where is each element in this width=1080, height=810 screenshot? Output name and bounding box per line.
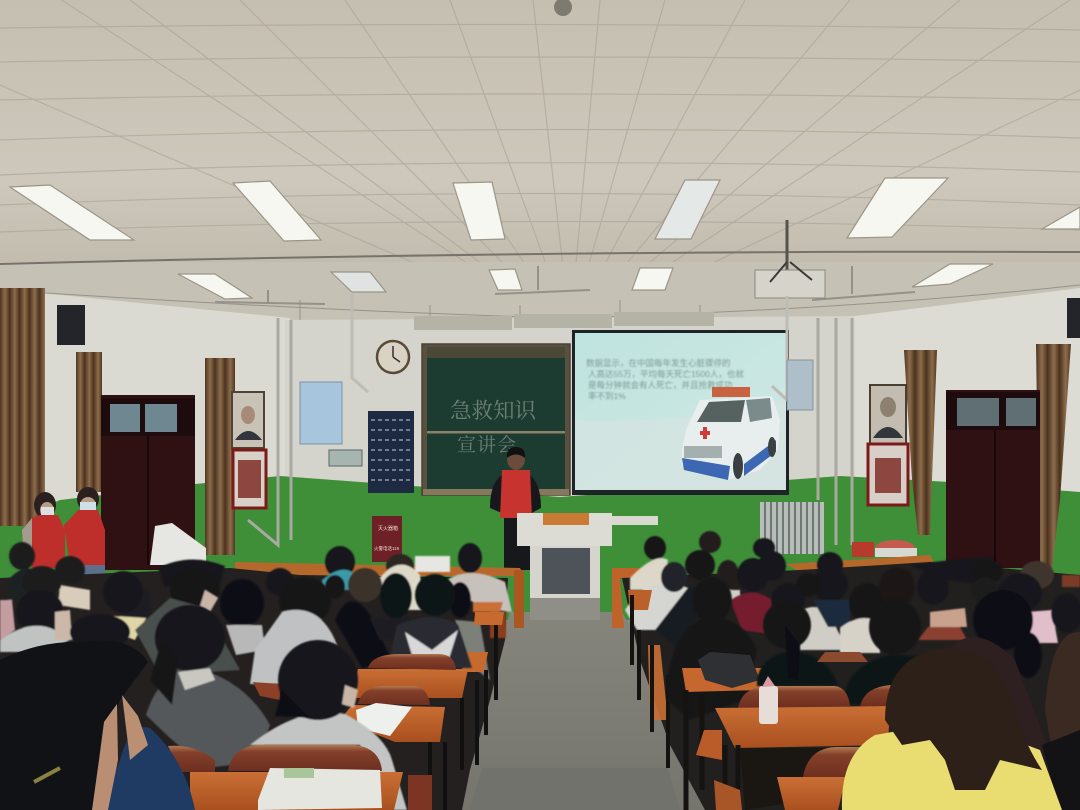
back row students right [625, 531, 1080, 678]
screen bullet text: 率不到1% [588, 391, 626, 401]
wall clock [377, 341, 409, 373]
gray hoodie ponytail student [146, 605, 270, 768]
fire extinguisher box: 灭火器箱 [378, 525, 398, 532]
left wall [30, 292, 290, 560]
dark student [843, 599, 922, 705]
hooded student grey [250, 577, 345, 684]
aisle desk edges right [628, 590, 668, 768]
ceiling [0, 0, 1080, 330]
radiator [760, 502, 824, 554]
screen bullet text: 是每分钟就会有人死亡，并且抢救成功 [588, 380, 733, 390]
red poster left [233, 450, 266, 508]
projector and mount [755, 220, 825, 400]
chalk heading: 急救知识 [450, 394, 537, 425]
fire extinguisher box [372, 516, 402, 562]
curtains [0, 288, 1071, 568]
desk with backpack [682, 652, 765, 810]
middle students left [0, 542, 472, 684]
speakers [57, 298, 1080, 345]
light hoodie student [250, 640, 407, 810]
ambulance [682, 387, 780, 480]
middle desks left [253, 654, 468, 810]
black cap student [0, 641, 148, 810]
ceiling fans [215, 266, 915, 304]
blue jacket student [100, 727, 195, 810]
long hair student right [890, 637, 1045, 760]
black jacket student with bag [667, 577, 757, 720]
screen bullet text [586, 358, 744, 401]
water bottle [759, 676, 778, 724]
poster right of screen [787, 360, 813, 410]
chalk subheading: 宣讲会 [457, 430, 517, 457]
small sign [329, 450, 362, 466]
yellow sweater student [842, 648, 1062, 810]
front row desks [235, 555, 935, 628]
left seating block shadow [0, 568, 508, 810]
right door [946, 390, 1040, 568]
front desks left [168, 745, 403, 810]
books on desk [258, 768, 382, 810]
chair backs right [738, 652, 893, 708]
wall pipes [248, 294, 852, 545]
presenter [490, 447, 541, 570]
right seating block shadow [622, 562, 1080, 810]
notebook on desk [356, 703, 412, 736]
right wall [855, 288, 1080, 560]
screen bullet text: 数据显示，在中国每年发生心脏骤停的 [586, 358, 731, 368]
wing jacket student [388, 574, 472, 668]
back row students left [266, 543, 512, 680]
fire extinguisher box: 火警电话119 [374, 545, 400, 552]
calendar grid poster [368, 411, 414, 493]
far right student [1042, 632, 1080, 810]
projection screen [572, 330, 789, 495]
blue notice [300, 382, 342, 444]
back wall [285, 316, 860, 520]
ponytail student [757, 601, 838, 686]
ceiling lights [10, 178, 1080, 299]
screen bullet text: 人高达55万，平均每天死亡1500人，也就 [588, 369, 744, 379]
fluorescent wall rail [414, 312, 714, 330]
lectern [517, 513, 658, 620]
front desk right [714, 706, 890, 810]
standing volunteers [22, 487, 105, 584]
aisle steps [470, 768, 680, 810]
white bag [150, 523, 206, 565]
portrait right [870, 385, 906, 445]
left door [101, 395, 195, 570]
chalkboard [422, 344, 570, 495]
red poster right [868, 444, 908, 505]
middle desks left column [462, 612, 504, 765]
aisle floor [460, 612, 735, 810]
green wall band [0, 476, 1080, 620]
portrait left [232, 392, 264, 448]
red basins [852, 540, 917, 557]
